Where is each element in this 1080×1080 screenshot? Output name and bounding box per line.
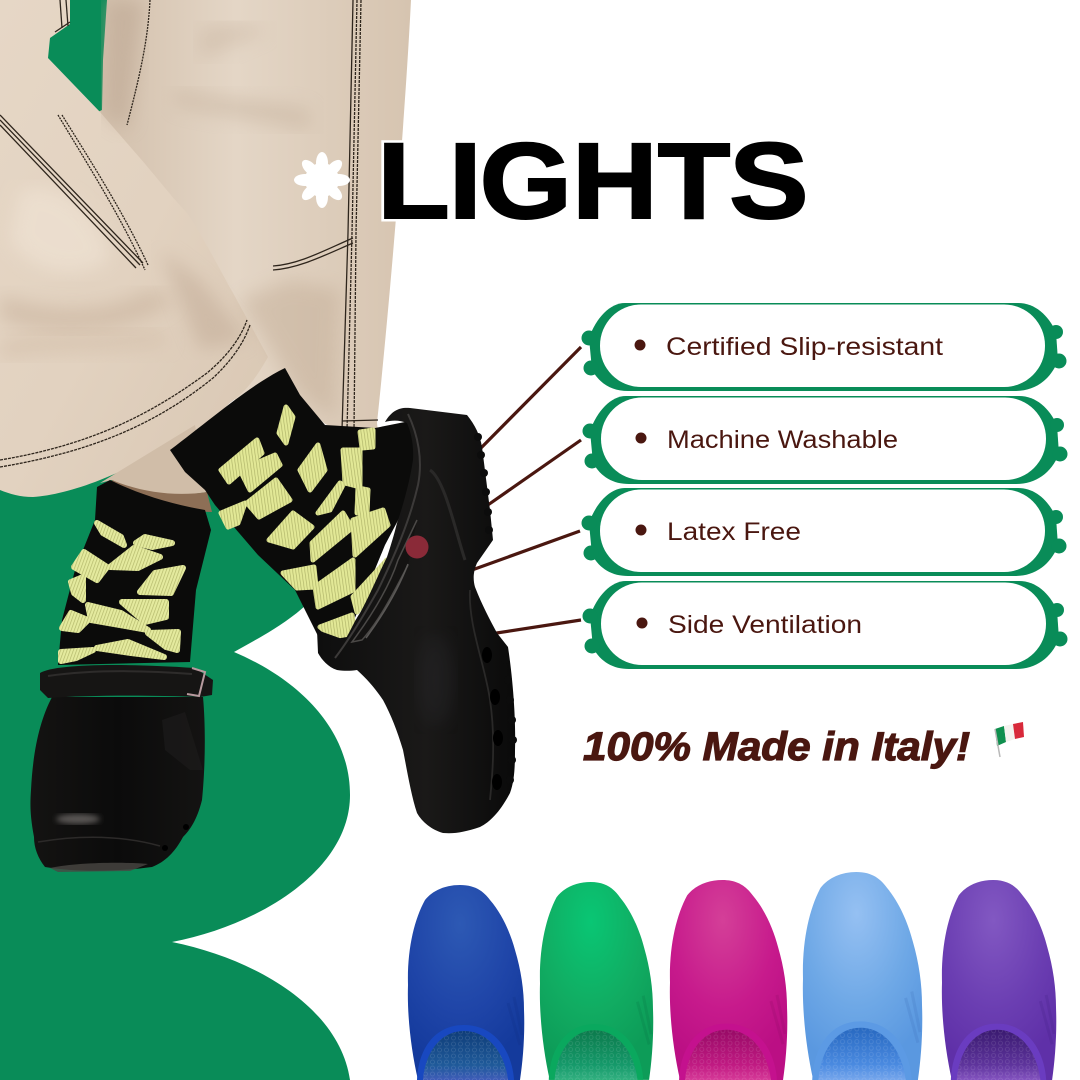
clog red rivet	[406, 536, 428, 558]
clog sole tread	[474, 433, 517, 784]
feature pill: Side Ventilation: Side Ventilation	[668, 611, 862, 639]
feature pill: Latex Free	[582, 488, 1066, 576]
clog vent holes	[482, 647, 503, 790]
trouser folds and shading	[0, 0, 340, 420]
feature pill: Machine Washable	[582, 396, 1068, 484]
feature pill: Latex Free: Latex Free	[667, 518, 801, 546]
feature pill: Certified Slip-resistant: Certified Slip-resistant	[666, 333, 943, 361]
title: LIGHTS	[377, 121, 809, 242]
title: LIGHTS	[377, 121, 809, 242]
front trouser leg	[0, 0, 268, 497]
left sock	[58, 480, 211, 665]
clog: sky blue	[803, 872, 922, 1080]
feature pill: Certified Slip-resistant	[582, 303, 1066, 391]
icon: Italian flag	[995, 722, 1024, 757]
made in Italy statement: 100% Made in Italy!	[583, 725, 970, 769]
clog: purple	[942, 880, 1056, 1080]
beige trousers	[0, 0, 411, 512]
inner trouser fold between legs	[100, 425, 208, 495]
trouser stitching	[0, 0, 378, 467]
clog: magenta	[670, 880, 787, 1080]
left black clog	[30, 665, 213, 872]
clog: green	[540, 882, 653, 1080]
clog collar rim	[335, 414, 420, 658]
icon: white flower	[294, 152, 350, 208]
skin at ankle	[108, 480, 212, 512]
right black clog	[317, 408, 517, 833]
feature pill: Machine Washable: Machine Washable	[667, 426, 898, 454]
green wavy background shape	[0, 0, 350, 1080]
feature pill: Side Ventilation	[582, 581, 1068, 669]
strap buckle	[187, 668, 205, 696]
right sock checks	[221, 407, 388, 637]
clog: royal blue	[408, 885, 524, 1080]
clog body	[30, 697, 205, 871]
left sock checks	[61, 523, 183, 661]
right sock	[170, 368, 415, 642]
clog body	[317, 408, 515, 833]
clog strap	[40, 665, 213, 698]
callout connector lines	[472, 347, 581, 634]
colour clogs row	[408, 872, 1056, 1080]
back trouser leg	[60, 0, 411, 432]
